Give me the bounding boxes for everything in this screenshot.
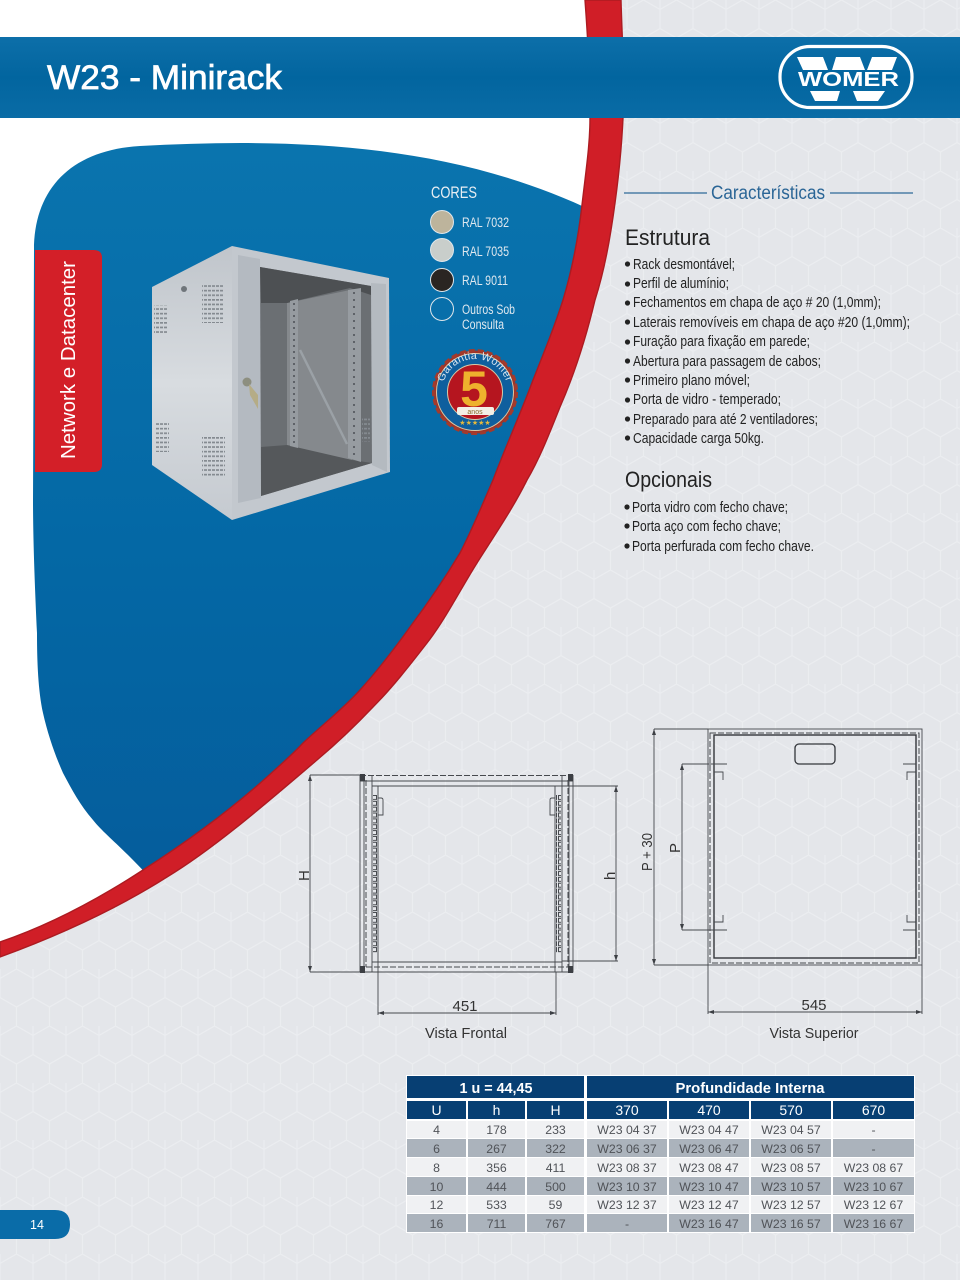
table: models: W23 16 47 [679, 1217, 739, 1231]
section: Estrutura: Preparado para até 2 ventiladores; [633, 412, 818, 428]
table: models: U [431, 1102, 442, 1118]
diagram: top view: Vista Superior [770, 1025, 858, 1042]
table: models: 444 [486, 1180, 507, 1194]
table: models: W23 04 57 [761, 1123, 821, 1137]
table: models: 6 [433, 1142, 440, 1156]
table: models: 178 [486, 1123, 507, 1137]
colours legend [430, 183, 515, 332]
title: W23 - Minirack [47, 59, 283, 97]
table: models: 356 [486, 1161, 507, 1175]
product photo: minirack cabinet [152, 246, 390, 520]
page number [0, 1210, 70, 1239]
section: Estrutura: Abertura para passagem de cabos; [633, 354, 821, 370]
table: models: 711 [487, 1217, 506, 1231]
table: models: 10 [430, 1180, 443, 1194]
section: Opcionais: Porta aço com fecho chave; [632, 519, 781, 535]
badge: 5 year warranty: 5 [460, 361, 488, 417]
table: models: W23 06 47 [679, 1142, 739, 1156]
table: models: W23 10 67 [844, 1180, 903, 1194]
table: models: W23 08 37 [597, 1161, 657, 1175]
table: models: H [550, 1102, 561, 1118]
table: models: 322 [545, 1142, 566, 1156]
section: Estrutura: Laterais removíveis em chapa de aço #20 (1,0mm); [633, 315, 910, 331]
table: models: W23 04 47 [679, 1123, 739, 1137]
badge: 5 year warranty [432, 349, 518, 435]
diagram: top view: P [667, 843, 684, 853]
heading: Características: Características [711, 183, 825, 204]
page number: 14 [30, 1218, 44, 1232]
table: models [406, 1075, 915, 1233]
section: Estrutura: Perfil de alumínio; [633, 276, 729, 292]
table: models: 370 [615, 1102, 639, 1118]
table: models: 767 [545, 1217, 566, 1231]
colours legend: RAL 7032 [462, 215, 509, 230]
table: models: Profundidade Interna [676, 1080, 825, 1097]
table: models: - [871, 1142, 876, 1156]
section: Opcionais: Opcionais [625, 467, 712, 492]
table: models: 1 u = 44,45 [460, 1080, 532, 1097]
table: models: - [625, 1217, 629, 1231]
table: models: W23 16 67 [844, 1217, 903, 1231]
table: models: 500 [545, 1180, 566, 1194]
badge: 5 year warranty: Garantia Womer [438, 352, 512, 380]
header band [0, 37, 960, 118]
badge: 5 year warranty: anos [467, 409, 483, 416]
table: models: W23 16 57 [761, 1217, 821, 1231]
tab: category [35, 250, 102, 472]
diagram: top view: 545 [801, 997, 827, 1014]
section: Estrutura [625, 225, 910, 447]
table: models: W23 12 67 [844, 1198, 903, 1212]
logo: Womer: WOMER [798, 68, 899, 91]
badge: 5 year warranty: ★★★★★ [459, 419, 491, 427]
table: models: 233 [545, 1123, 566, 1137]
table: models: W23 10 37 [597, 1180, 657, 1194]
table: models: W23 06 57 [761, 1142, 821, 1156]
section: Estrutura: Estrutura [625, 225, 711, 250]
table: models: W23 04 37 [597, 1123, 657, 1137]
section: Opcionais: Porta vidro com fecho chave; [632, 500, 788, 516]
logo: Womer [780, 46, 912, 108]
table: models: 570 [779, 1102, 803, 1118]
table: models: 470 [697, 1102, 721, 1118]
table: models: W23 12 37 [597, 1198, 657, 1212]
table: models: 533 [486, 1198, 507, 1212]
red curved stripe [0, 0, 624, 957]
section: Estrutura: Furação para fixação em parede; [633, 334, 810, 350]
diagram: front view: 451 [452, 998, 478, 1015]
table: models: - [871, 1123, 876, 1137]
tab: category: Network e Datacenter [58, 261, 80, 459]
blue panel [33, 143, 595, 878]
colours legend: CORES [431, 183, 477, 202]
diagram: top view: P + 30 [639, 833, 656, 871]
diagram: front view: H [296, 870, 313, 881]
section: Estrutura: Fechamentos em chapa de aço # 20 (1,0mm); [633, 295, 881, 311]
diagram: front view: h [602, 872, 619, 880]
table: models: 12 [430, 1198, 443, 1212]
diagram: front view [296, 774, 619, 1042]
colours legend: RAL 9011 [462, 273, 508, 288]
section: Estrutura: Porta de vidro - temperado; [633, 392, 781, 408]
colours legend: RAL 7035 [462, 244, 509, 259]
table: models: 59 [549, 1198, 562, 1212]
table: models: W23 12 47 [679, 1198, 739, 1212]
table: models: W23 12 57 [761, 1198, 821, 1212]
colours legend: Outros Sob [462, 302, 515, 317]
section: Estrutura: Capacidade carga 50kg. [633, 431, 764, 447]
table: models: W23 08 47 [679, 1161, 739, 1175]
section: Estrutura: Rack desmontável; [633, 257, 735, 273]
table: models: 8 [433, 1161, 440, 1175]
section: Opcionais [624, 467, 814, 555]
white swoosh area [0, 0, 590, 942]
table: models: W23 08 67 [844, 1161, 903, 1175]
table: models: 16 [430, 1217, 443, 1231]
section: Estrutura: Primeiro plano móvel; [633, 373, 750, 389]
table: models: 411 [546, 1161, 565, 1175]
colours legend: Consulta [462, 317, 504, 332]
diagram: front view: Vista Frontal [425, 1025, 507, 1042]
table: models: h [493, 1102, 500, 1118]
table: models: 267 [486, 1142, 507, 1156]
table: models: W23 08 57 [761, 1161, 821, 1175]
table: models: 4 [433, 1123, 440, 1137]
table: models: W23 10 47 [679, 1180, 739, 1194]
table: models: W23 06 37 [597, 1142, 657, 1156]
section: Opcionais: Porta perfurada com fecho chave. [632, 539, 814, 555]
diagram: top view [639, 729, 922, 1042]
table: models: 670 [862, 1102, 885, 1118]
table: models: W23 10 57 [761, 1180, 821, 1194]
